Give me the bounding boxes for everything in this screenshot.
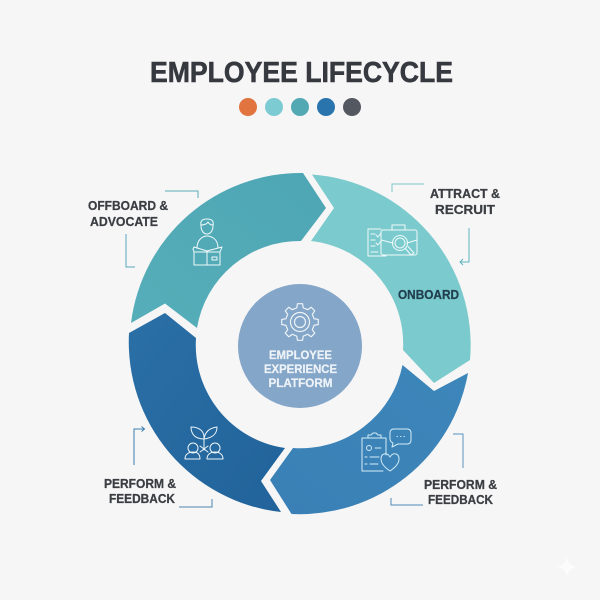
label: attract and recruit: RECRUIT (435, 203, 495, 217)
centre label: EMPLOYEE (269, 348, 332, 362)
label: offboard and advocate: ADVOCATE (90, 215, 158, 229)
label: perform and feedback left: FEEDBACK (109, 492, 175, 506)
label: perform and feedback right: FEEDBACK (428, 493, 493, 507)
icon: clipboard, bubble and heart (362, 429, 411, 471)
centre circle (238, 284, 362, 408)
colour dots row (239, 98, 361, 116)
icon: gear (282, 304, 318, 340)
label: perform and feedback left (104, 477, 176, 506)
segment: attract and onboard (311, 174, 471, 383)
icon: person with box (193, 219, 222, 265)
label: perform and feedback left: PERFORM & (104, 477, 176, 491)
arrow: perform left (134, 426, 144, 465)
label: onboard: ONBOARD (398, 288, 459, 302)
arrow: attract right (460, 228, 469, 265)
centre label (264, 348, 337, 390)
bracket: offboard top (165, 191, 198, 198)
bracket: offboard left (126, 234, 135, 267)
bracket: perform right top (453, 434, 463, 468)
sparkle watermark (557, 557, 577, 577)
segment: offboard (131, 173, 326, 328)
title: EMPLOYEE LIFECYCLE (150, 57, 453, 89)
label: offboard and advocate (88, 199, 168, 229)
label: perform and feedback right: PERFORM & (424, 478, 497, 492)
label: attract and recruit: ATTRACT & (430, 187, 500, 201)
bracket: attract top (392, 184, 424, 192)
bracket: perform left bottom (179, 499, 212, 507)
icon: briefcase and checklist (368, 225, 417, 256)
label: attract and recruit (430, 187, 500, 217)
centre label: EXPERIENCE (264, 362, 337, 376)
label: perform and feedback right (424, 478, 497, 507)
segment: perform right (270, 365, 468, 514)
segment: perform left (129, 313, 285, 512)
bracket: perform right bottom (391, 498, 423, 505)
icon: plant and people (185, 427, 223, 459)
label: offboard and advocate: OFFBOARD & (88, 199, 168, 213)
centre label: PLATFORM (268, 376, 333, 390)
